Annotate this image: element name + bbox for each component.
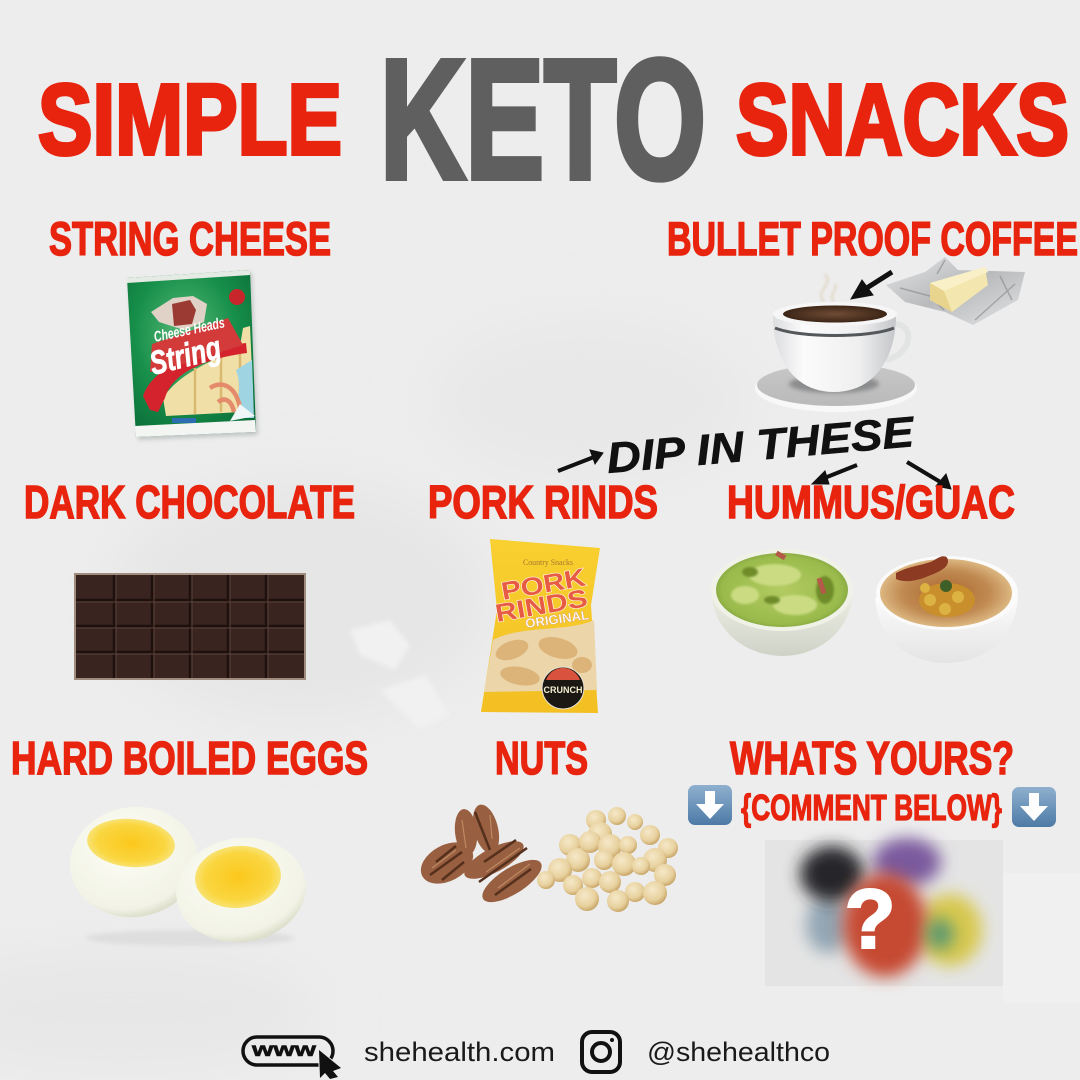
icon: coffee cup with butter (755, 257, 1025, 412)
heading: nuts: NUTS (495, 732, 588, 784)
icon: pork rinds bag: RINDS (493, 584, 590, 628)
icon: string cheese package (127, 270, 258, 440)
title word: KETO: KETO (380, 25, 706, 215)
arrow: to guac (907, 462, 951, 489)
heading: string cheese: STRING CHEESE (49, 212, 331, 265)
arrow: to coffee (851, 272, 892, 299)
website: shehealth.com (364, 1037, 555, 1067)
heading: dark chocolate: DARK CHOCOLATE (24, 476, 355, 528)
icon: hard boiled eggs (63, 799, 313, 951)
title word: SIMPLE: SIMPLE (38, 64, 342, 176)
icon: instagram (582, 1032, 620, 1072)
call to action: comment below (688, 785, 1056, 828)
icon: hummus bowl (875, 556, 1018, 663)
question mark: ? (844, 872, 896, 966)
arrow: to hummus (812, 465, 857, 484)
footer (243, 1032, 830, 1079)
icon: pecans (414, 802, 548, 910)
butter in foil (886, 257, 1025, 325)
icon: pork rinds bag: CRUNCH (544, 685, 582, 695)
icon: guacamole bowl (711, 549, 853, 656)
icon: down arrow left (688, 785, 732, 825)
heading: hummus guac: HUMMUS/GUAC (727, 476, 1015, 528)
icon: pork rinds bag: ORIGINAL (524, 607, 590, 631)
heading: pork rinds: PORK RINDS (428, 476, 658, 528)
note text: DIP IN THESE (605, 408, 917, 483)
instagram handle: @shehealthco (647, 1037, 830, 1067)
heading: hard boiled eggs: HARD BOILED EGGS (11, 732, 368, 784)
arrow: to pork rinds (558, 450, 603, 471)
bag label: PORK (499, 564, 588, 606)
icon: chocolate bar (74, 573, 306, 680)
icon: string cheese package: String (146, 328, 225, 382)
package text: Cheese Heads (152, 314, 226, 346)
title (38, 25, 1069, 215)
icon: blurred mystery snack (765, 838, 1080, 1003)
icon: down arrow right (1012, 787, 1056, 827)
icon: www cursor: www (251, 1040, 316, 1061)
icon: macadamia nuts (537, 807, 678, 912)
icon: pork rinds bag (481, 539, 600, 713)
icon: www cursor (243, 1037, 341, 1079)
bag brand: Country Snacks (523, 558, 573, 567)
handwritten note: dip in these (558, 408, 951, 489)
